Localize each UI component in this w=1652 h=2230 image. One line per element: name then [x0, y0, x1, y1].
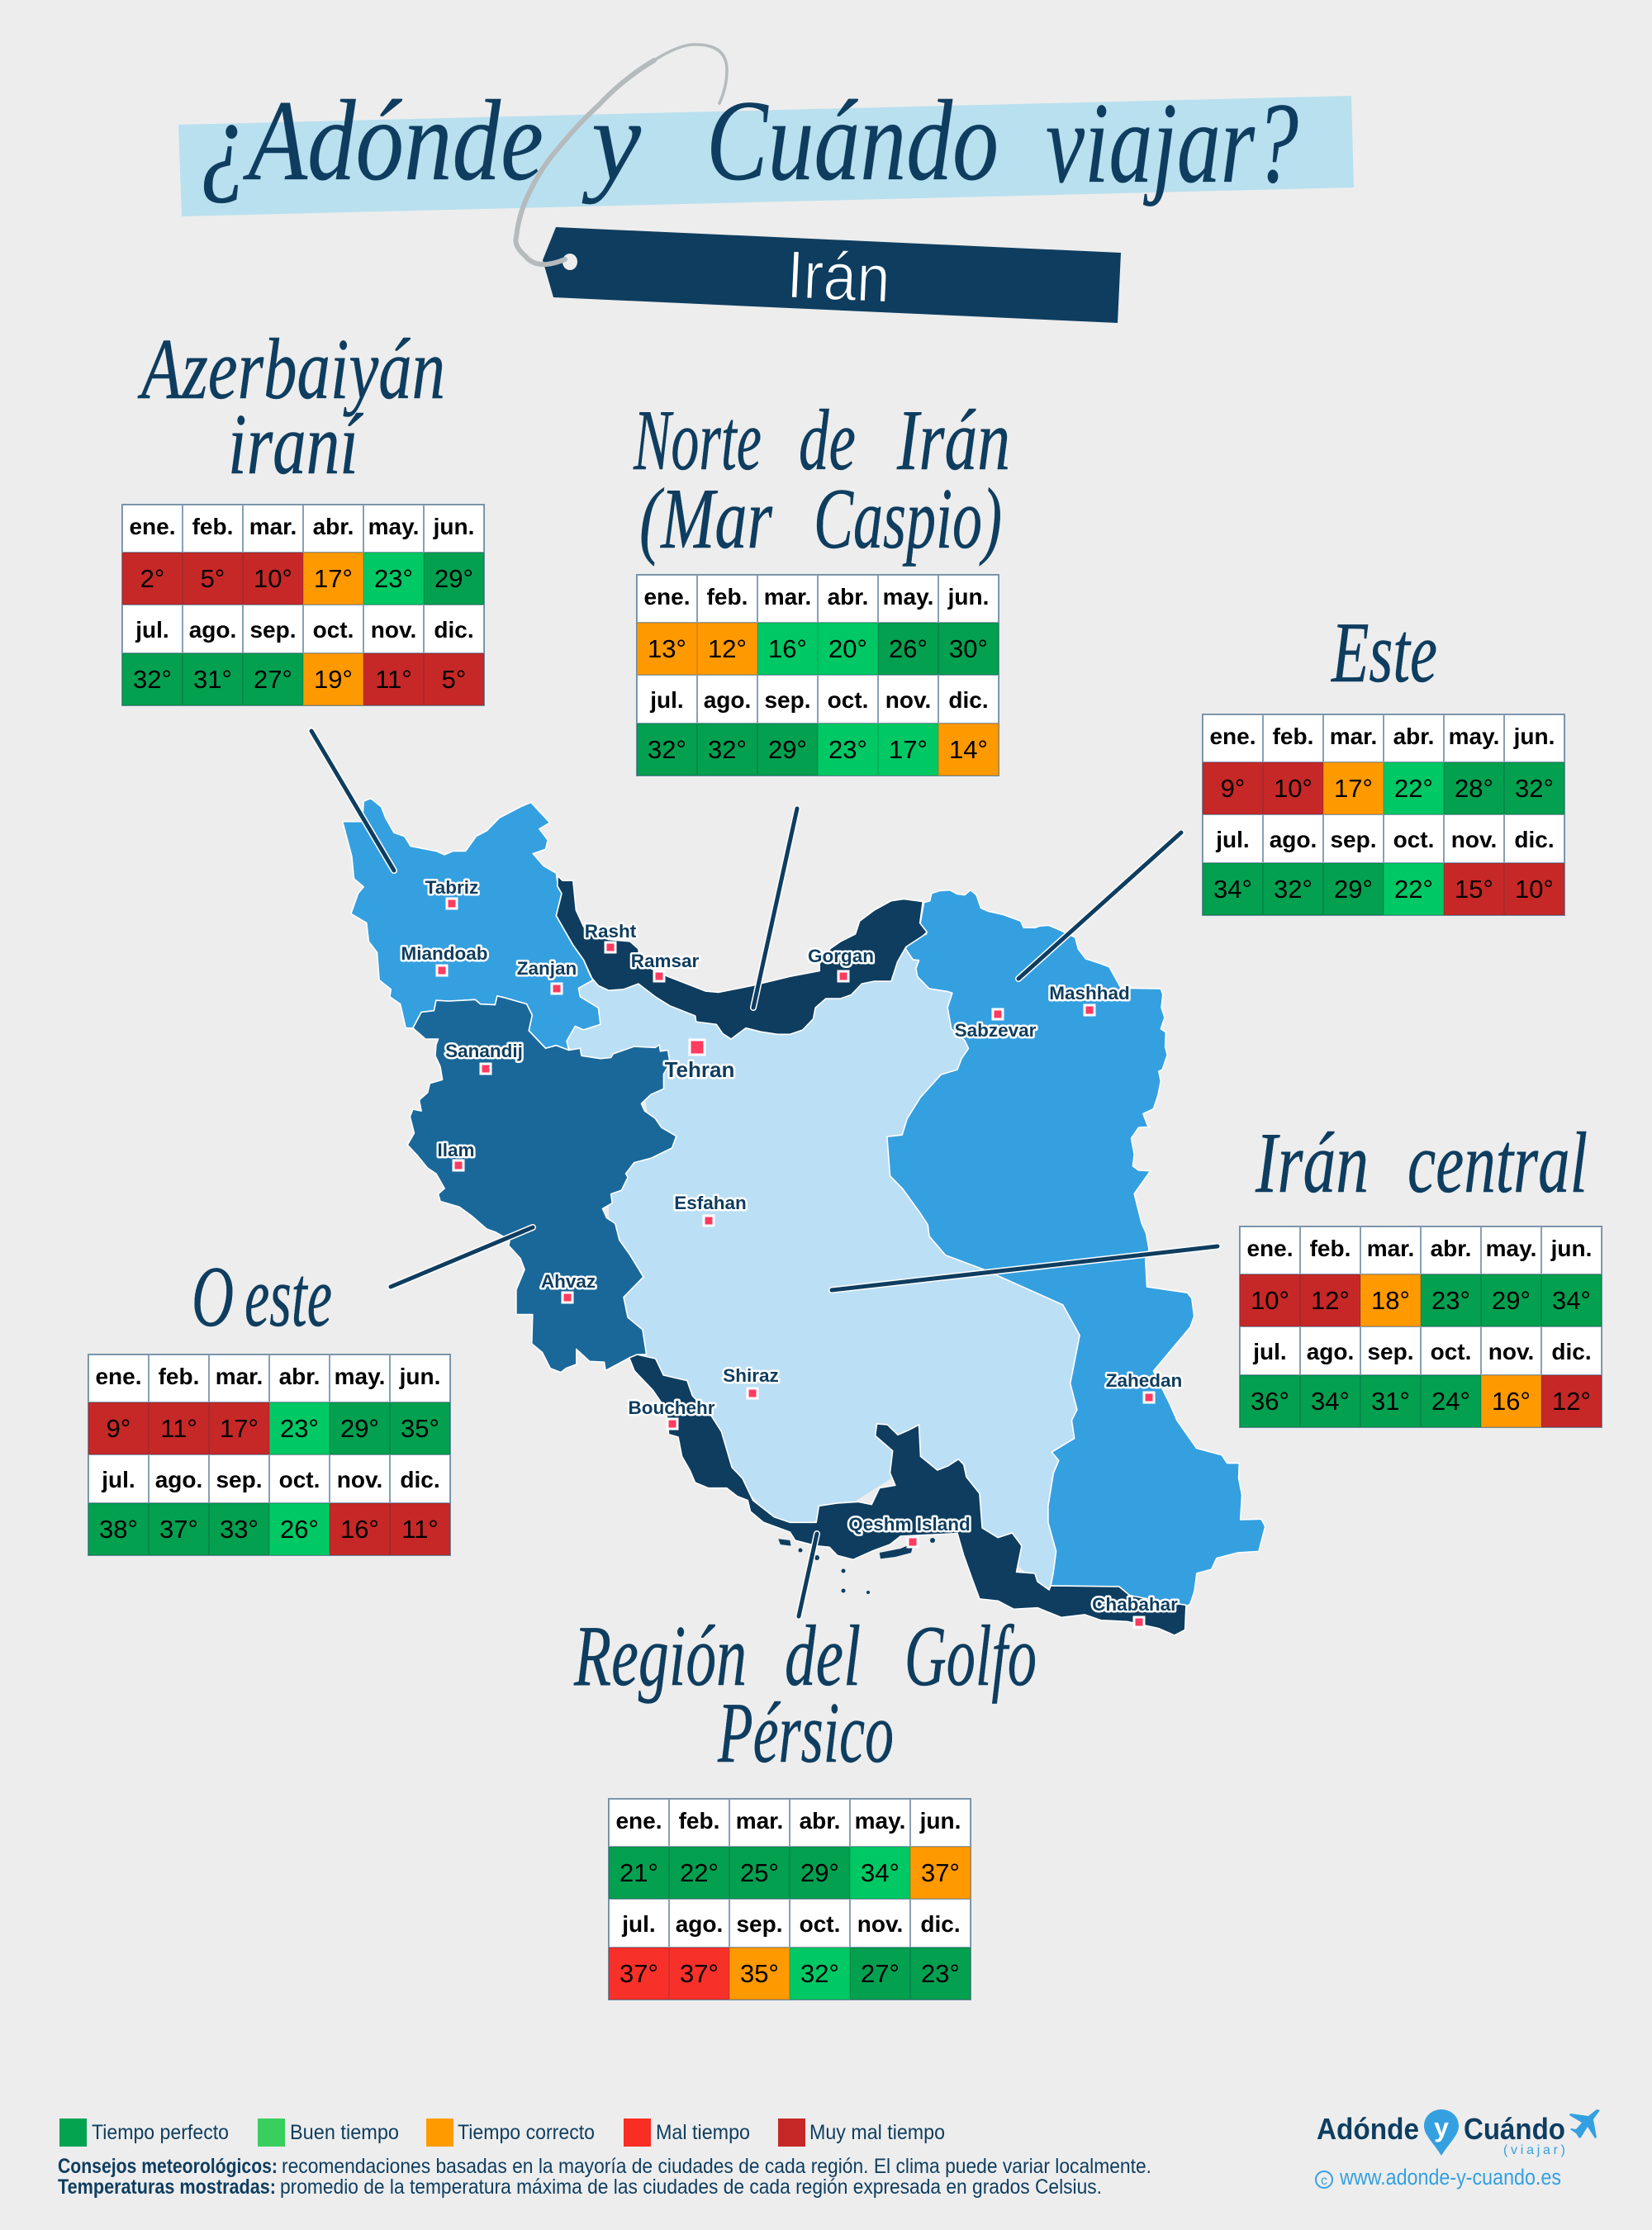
- table: Este: may.: [1449, 724, 1499, 749]
- table: Irán central: ago.: [1307, 1339, 1354, 1364]
- table: Oeste: [88, 1354, 451, 1556]
- table: Norte de Irán: sep.: [764, 687, 811, 713]
- table: Región del Golfo Pérsico: dic.: [920, 1911, 961, 1937]
- notes: recomendaciones basadas en la mayoría de ciudades de cada región. El clima puede variar localmente.: [282, 2155, 1151, 2178]
- table: Oeste: oct.: [279, 1467, 320, 1492]
- legend: Buen tiempo: [290, 2121, 399, 2144]
- table: Irán central: 34°: [1311, 1386, 1350, 1416]
- title: [200, 77, 1298, 207]
- table: Oeste: dic.: [400, 1467, 440, 1492]
- table: Azerbaiyán iraní: 17°: [314, 563, 353, 593]
- logo: Cuándo: [1464, 2112, 1565, 2146]
- heading: Región del Golfo Pérsico: Pérsico: [717, 1684, 894, 1781]
- table: Región del Golfo Pérsico: may.: [855, 1808, 905, 1834]
- region: Este: [887, 890, 1265, 1608]
- table: Norte de Irán: 16°: [768, 634, 807, 662]
- notes: Consejos meteorológicos:: [58, 2155, 278, 2178]
- table: Azerbaiyán iraní: 31°: [193, 664, 232, 694]
- city labels: Zanjan: [517, 958, 577, 979]
- heading: Región del Golfo Pérsico: Región: [573, 1607, 747, 1704]
- region: Azerbaiyán iraní: [343, 799, 601, 1050]
- heading: Norte de Irán (Mar Caspio): [633, 391, 1010, 567]
- table: Norte de Irán: feb.: [707, 584, 748, 610]
- title banner: [178, 96, 1354, 216]
- table: Azerbaiyán iraní: ago.: [189, 617, 236, 643]
- table: Este: ene.: [1209, 724, 1256, 749]
- table: Azerbaiyán iraní: 27°: [254, 664, 292, 694]
- table: Oeste: 29°: [340, 1414, 379, 1442]
- table: Región del Golfo Pérsico: feb.: [679, 1808, 719, 1834]
- heading: Oeste: O: [192, 1248, 234, 1345]
- table: Azerbaiyán iraní: ene.: [129, 514, 176, 539]
- city markers: [437, 899, 1154, 1627]
- table: Oeste: mar.: [216, 1364, 263, 1389]
- table: Irán central: may.: [1486, 1236, 1536, 1261]
- table: Irán central: jul.: [1253, 1339, 1287, 1364]
- table: Región del Golfo Pérsico: sep.: [736, 1911, 783, 1937]
- table: Región del Golfo Pérsico: 35°: [740, 1959, 779, 1987]
- table: Este: dic.: [1514, 827, 1555, 852]
- table: Irán central: sep.: [1367, 1339, 1414, 1364]
- heading: Azerbaiyán iraní: [137, 320, 445, 492]
- table: Oeste: 23°: [280, 1414, 319, 1442]
- table: Azerbaiyán iraní: feb.: [192, 514, 233, 539]
- table: Azerbaiyán iraní: nov.: [371, 617, 416, 643]
- table: Norte de Irán: [636, 574, 999, 776]
- city labels: Tabriz: [425, 877, 478, 898]
- table: Irán central: [1239, 1226, 1602, 1428]
- table: Este: 34°: [1213, 874, 1252, 904]
- table: Oeste: 37°: [159, 1515, 198, 1543]
- table: Región del Golfo Pérsico: 29°: [800, 1858, 839, 1886]
- table: Norte de Irán: 29°: [768, 735, 807, 763]
- table: Este: 22°: [1394, 773, 1433, 803]
- city labels: Shiraz: [723, 1365, 779, 1386]
- table: Irán central: 31°: [1371, 1386, 1410, 1416]
- table: Este: jun.: [1514, 724, 1555, 749]
- table: Norte de Irán: 26°: [889, 634, 928, 662]
- table: Norte de Irán: jul.: [650, 687, 684, 713]
- heading: Norte de Irán (Mar Caspio): (Mar: [639, 470, 773, 567]
- city labels: Rasht: [585, 921, 637, 942]
- table: Este: 9°: [1221, 773, 1245, 803]
- city labels: Sanandij: [445, 1041, 523, 1061]
- logo: Adónde: [1317, 2112, 1419, 2146]
- table: Oeste: jul.: [102, 1467, 135, 1492]
- table: Región del Golfo Pérsico: mar.: [736, 1808, 783, 1834]
- heading: Irán central: [1255, 1114, 1588, 1211]
- heading: Región del Golfo Pérsico: Golfo: [904, 1607, 1037, 1704]
- table: Norte de Irán: may.: [883, 584, 933, 610]
- table: Oeste: ene.: [95, 1364, 142, 1389]
- table: Oeste: may.: [335, 1364, 385, 1389]
- table: Región del Golfo Pérsico: oct.: [800, 1911, 840, 1937]
- notes: [58, 2155, 1151, 2199]
- legend: Mal tiempo: [656, 2121, 750, 2144]
- city labels: Miandoab: [401, 943, 487, 964]
- table: Región del Golfo Pérsico: ago.: [676, 1911, 723, 1937]
- heading: Región del Golfo Pérsico: [573, 1607, 1037, 1781]
- table: Irán central: abr.: [1431, 1236, 1471, 1261]
- legend: Tiempo perfecto: [92, 2121, 229, 2144]
- table: Norte de Irán: ago.: [704, 687, 751, 713]
- table: Oeste: 16°: [340, 1515, 379, 1543]
- table: Azerbaiyán iraní: 32°: [133, 664, 172, 694]
- tag: Irán: Irán: [786, 237, 892, 317]
- table: Este: feb.: [1273, 724, 1313, 749]
- table: Este: oct.: [1393, 827, 1434, 852]
- region: Golfo Pérsico: [629, 1355, 1186, 1635]
- table: Norte de Irán: 32°: [648, 735, 686, 763]
- logo: y: [1434, 2113, 1449, 2142]
- table: Oeste: 33°: [220, 1515, 259, 1543]
- table: Oeste: feb.: [159, 1364, 199, 1389]
- heading: Norte de Irán (Mar Caspio): Norte: [633, 391, 762, 488]
- city labels: Qeshm Island: [848, 1514, 971, 1535]
- table: Región del Golfo Pérsico: 37°: [680, 1959, 719, 1987]
- table: Este: 15°: [1455, 874, 1493, 904]
- table: Azerbaiyán iraní: 2°: [140, 563, 164, 593]
- table: Región del Golfo Pérsico: 32°: [800, 1959, 839, 1987]
- table: Norte de Irán: 14°: [949, 735, 988, 763]
- table: Región del Golfo Pérsico: abr.: [800, 1808, 840, 1834]
- heading: Oeste: [192, 1248, 332, 1345]
- table: Irán central: 12°: [1552, 1386, 1591, 1416]
- table: Norte de Irán: 30°: [949, 634, 988, 662]
- table: Este: 29°: [1334, 874, 1373, 904]
- table: Azerbaiyán iraní: jun.: [434, 514, 474, 539]
- table: Irán central: ene.: [1246, 1236, 1294, 1261]
- table: Azerbaiyán iraní: 23°: [374, 563, 413, 593]
- table: Azerbaiyán iraní: jul.: [135, 617, 169, 643]
- heading: Norte de Irán (Mar Caspio): de: [799, 391, 856, 488]
- table: Oeste: 11°: [401, 1515, 439, 1543]
- table: Azerbaiyán iraní: 5°: [442, 664, 466, 694]
- table: Este: mar.: [1330, 724, 1377, 749]
- heading: Región del Golfo Pérsico: del: [785, 1607, 861, 1704]
- table: Norte de Irán: 17°: [889, 735, 928, 763]
- logo: [1316, 2109, 1600, 2190]
- table: Oeste: abr.: [279, 1364, 320, 1389]
- table: Este: nov.: [1451, 827, 1497, 852]
- table: Azerbaiyán iraní: dic.: [434, 617, 474, 643]
- tag string: [515, 45, 727, 264]
- city labels: Esfahan: [674, 1193, 747, 1213]
- table: Región del Golfo Pérsico: 23°: [921, 1959, 960, 1987]
- table: Norte de Irán: abr.: [828, 584, 868, 610]
- table: Azerbaiyán iraní: sep.: [249, 617, 297, 643]
- pointer lines: [311, 731, 1218, 1616]
- heading: Irán central: Irán: [1255, 1114, 1369, 1211]
- heading: Este: Este: [1331, 604, 1437, 700]
- table: Región del Golfo Pérsico: 37°: [921, 1858, 960, 1886]
- city labels: Sabzevar: [955, 1020, 1037, 1041]
- table: Región del Golfo Pérsico: [608, 1798, 971, 2000]
- title: Cuándo: [706, 77, 999, 205]
- table: Región del Golfo Pérsico: 37°: [620, 1959, 658, 1987]
- table: Irán central: oct.: [1431, 1339, 1471, 1364]
- notes: Temperaturas mostradas:: [58, 2175, 276, 2199]
- table: Norte de Irán: 13°: [648, 634, 686, 662]
- map of Iran: [343, 799, 1265, 1635]
- table: Azerbaiyán iraní: 19°: [314, 664, 353, 694]
- logo: (viajar): [1503, 2143, 1565, 2157]
- table: Irán central: mar.: [1367, 1236, 1414, 1261]
- table: Este: 10°: [1515, 874, 1554, 904]
- table: Norte de Irán: 12°: [708, 634, 747, 662]
- table: Oeste: 17°: [220, 1414, 259, 1442]
- city labels: [401, 877, 1182, 1615]
- heading: Irán central: central: [1408, 1114, 1588, 1211]
- table: Azerbaiyán iraní: mar.: [249, 514, 297, 539]
- heading: Azerbaiyán iraní: Azerbaiyán: [137, 320, 445, 417]
- heading: Norte de Irán (Mar Caspio): Caspio): [814, 470, 1002, 567]
- table: Irán central: 29°: [1492, 1285, 1531, 1315]
- table: Norte de Irán: ene.: [643, 584, 691, 610]
- table: Este: 17°: [1334, 773, 1373, 803]
- notes: promedio de la temperatura máxima de las ciudades de cada región expresada en grados Celsius.: [280, 2175, 1102, 2199]
- table: Azerbaiyán iraní: 5°: [201, 563, 225, 593]
- table: Este: ago.: [1270, 827, 1317, 852]
- logo: www.adonde-y-cuando.es: [1339, 2165, 1561, 2190]
- table: Oeste: 38°: [99, 1515, 138, 1543]
- table: Norte de Irán: oct.: [828, 687, 868, 713]
- table: Oeste: sep.: [216, 1467, 263, 1492]
- heading: Norte de Irán (Mar Caspio): Irán: [896, 391, 1010, 488]
- table: Región del Golfo Pérsico: 21°: [620, 1858, 658, 1886]
- table: Irán central: 24°: [1431, 1386, 1470, 1416]
- table: Región del Golfo Pérsico: jul.: [622, 1911, 656, 1937]
- region: Norte de Irán: [556, 875, 927, 1039]
- city labels: Gorgan: [808, 946, 874, 966]
- legend: [59, 2118, 945, 2147]
- table: Irán central: dic.: [1551, 1339, 1592, 1364]
- table: Azerbaiyán iraní: 11°: [375, 664, 412, 694]
- table: Azerbaiyán iraní: [121, 504, 485, 706]
- tag: Irán: [543, 227, 1121, 323]
- table: Oeste: 35°: [401, 1414, 439, 1442]
- table: Azerbaiyán iraní: oct.: [313, 617, 354, 643]
- region: Oeste: [407, 996, 676, 1373]
- table: Irán central: 12°: [1311, 1285, 1350, 1315]
- table: Este: 10°: [1274, 773, 1313, 803]
- heading: Oeste: este: [244, 1248, 332, 1345]
- table: Irán central: 16°: [1492, 1386, 1531, 1416]
- city labels: Zahedan: [1106, 1370, 1182, 1391]
- table: Oeste: 9°: [107, 1414, 131, 1442]
- table: Norte de Irán: 23°: [828, 735, 867, 763]
- table: Oeste: 26°: [280, 1515, 319, 1543]
- logo: c: [1321, 2174, 1327, 2188]
- table: Irán central: 34°: [1552, 1285, 1591, 1315]
- table: Este: [1202, 714, 1565, 916]
- table: Irán central: 10°: [1251, 1285, 1289, 1315]
- table: Irán central: 18°: [1371, 1285, 1410, 1315]
- heading: Azerbaiyán iraní: iraní: [228, 396, 363, 492]
- islands: [778, 1538, 935, 1594]
- table: Oeste: jun.: [400, 1364, 440, 1389]
- table: Región del Golfo Pérsico: 22°: [680, 1858, 719, 1886]
- table: Norte de Irán: 32°: [708, 735, 747, 763]
- city labels: Bouchehr: [628, 1397, 715, 1418]
- table: Este: 32°: [1515, 773, 1554, 803]
- title: ¿Adónde: [200, 77, 544, 205]
- city labels: Mashhad: [1049, 983, 1130, 1004]
- table: Azerbaiyán iraní: 29°: [434, 563, 473, 593]
- table: Norte de Irán: jun.: [948, 584, 989, 610]
- title: viajar?: [1046, 79, 1298, 207]
- table: Norte de Irán: dic.: [948, 687, 989, 713]
- table: Oeste: nov.: [337, 1467, 382, 1492]
- table: Norte de Irán: 20°: [828, 634, 867, 662]
- table: Irán central: 23°: [1431, 1285, 1470, 1315]
- table: Norte de Irán: nov.: [885, 687, 931, 713]
- table: Irán central: nov.: [1488, 1339, 1534, 1364]
- table: Este: abr.: [1393, 724, 1434, 749]
- table: Este: sep.: [1330, 827, 1377, 852]
- table: Región del Golfo Pérsico: 25°: [740, 1858, 779, 1886]
- table: Norte de Irán: mar.: [764, 584, 811, 610]
- city labels: Ahvaz: [541, 1271, 596, 1292]
- table: Irán central: feb.: [1310, 1236, 1351, 1261]
- city labels: Chabahar: [1092, 1594, 1178, 1615]
- city labels: Ilam: [437, 1140, 475, 1160]
- table: Este: jul.: [1216, 827, 1250, 852]
- table: Azerbaiyán iraní: may.: [368, 514, 419, 539]
- table: Oeste: 11°: [160, 1414, 197, 1442]
- table: Irán central: 36°: [1251, 1386, 1289, 1416]
- legend: Muy mal tiempo: [809, 2121, 945, 2144]
- table: Azerbaiyán iraní: 10°: [254, 563, 292, 593]
- table: Región del Golfo Pérsico: nov.: [857, 1911, 903, 1937]
- region: Irán central: [563, 946, 1099, 1594]
- table: Este: 32°: [1274, 874, 1313, 904]
- legend: Tiempo correcto: [458, 2121, 595, 2144]
- city labels: Ramsar: [631, 951, 700, 971]
- table: Región del Golfo Pérsico: ene.: [615, 1808, 662, 1834]
- table: Este: 22°: [1394, 874, 1433, 904]
- title: y: [582, 77, 642, 205]
- table: Región del Golfo Pérsico: 27°: [861, 1959, 900, 1987]
- table: Azerbaiyán iraní: abr.: [313, 514, 354, 539]
- table: Irán central: jun.: [1551, 1236, 1592, 1261]
- table: Oeste: ago.: [155, 1467, 202, 1492]
- table: Este: 28°: [1455, 773, 1493, 803]
- table: Región del Golfo Pérsico: 34°: [861, 1858, 900, 1886]
- table: Región del Golfo Pérsico: jun.: [920, 1808, 961, 1834]
- city labels: Tehran: [665, 1057, 734, 1082]
